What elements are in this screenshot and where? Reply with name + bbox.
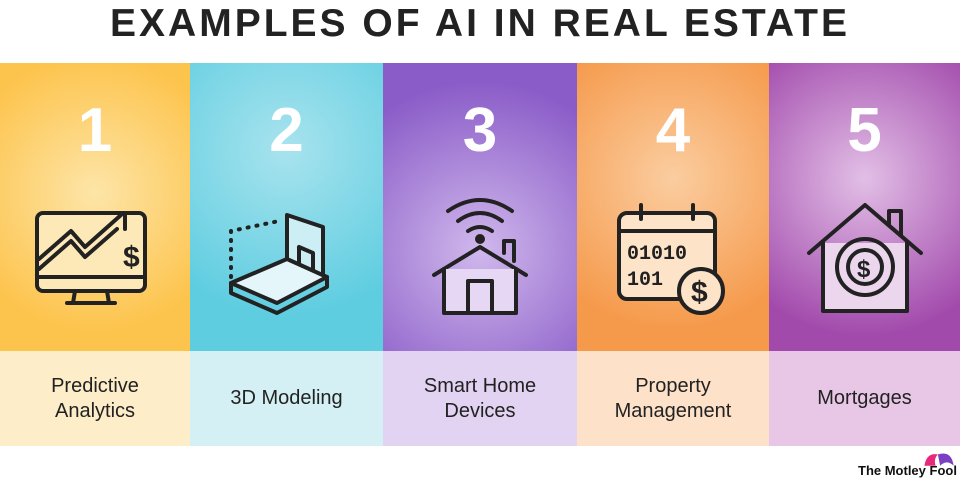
label: 3d modeling: 3D Modeling: [230, 387, 343, 409]
icon: calendar dollar: 101: [627, 269, 663, 292]
label: predictive analytics: Analytics: [55, 400, 135, 422]
label: predictive analytics: [0, 351, 190, 446]
panel: predictive analytics: [0, 63, 190, 351]
number 1: 1: [78, 96, 112, 165]
icon: house dollar: $: [856, 256, 870, 283]
label: 3d modeling: [190, 351, 383, 446]
label: property management: Management: [615, 400, 731, 422]
number 2: 2: [269, 96, 304, 165]
label: smart home devices: Smart Home: [424, 374, 536, 396]
icon: 3d model: [228, 213, 330, 315]
icon: monitor chart: [35, 211, 147, 305]
label: property management: [577, 351, 769, 446]
panel: 3d modeling: [190, 63, 383, 351]
logo: the motley fool: [858, 454, 957, 478]
logo: the motley fool: The Motley Fool: [858, 463, 957, 478]
icon: calendar dollar: 01010: [627, 243, 687, 266]
label: predictive analytics: Predictive: [51, 374, 139, 396]
panel: property management: [577, 63, 769, 351]
label: smart home devices: [383, 351, 577, 446]
icon: calendar dollar: $: [691, 276, 708, 309]
label: smart home devices: Devices: [444, 400, 516, 422]
title: EXAMPLES OF AI IN REAL ESTATE: [110, 2, 850, 45]
number 4: 4: [656, 96, 690, 165]
label: mortgages: Mortgages: [817, 387, 912, 409]
label: property management: Property: [635, 374, 711, 396]
icon: calendar dollar: [617, 203, 725, 315]
icon: monitor chart: $: [123, 241, 140, 274]
label: mortgages: [769, 351, 960, 446]
number 3: 3: [463, 96, 497, 165]
panel: mortgages: [769, 63, 960, 351]
icon: smart home: [432, 198, 528, 315]
icon: house dollar: [806, 202, 924, 313]
number 5: 5: [847, 96, 882, 165]
panel: smart home: [383, 63, 577, 351]
